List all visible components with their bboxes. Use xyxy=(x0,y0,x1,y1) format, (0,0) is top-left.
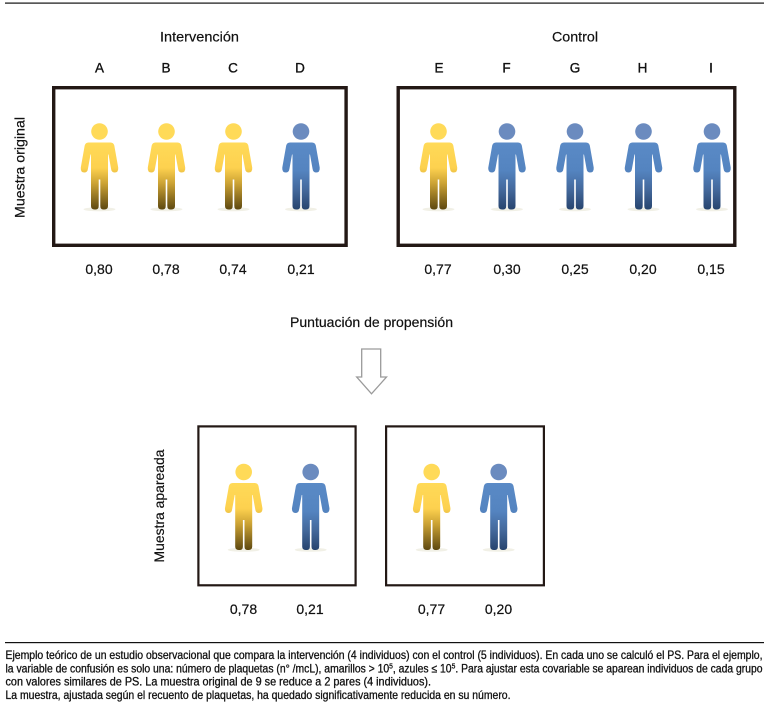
axis label: Muestra original: Muestra original xyxy=(12,117,28,218)
panel: intervención original xyxy=(54,88,346,245)
column letters: H xyxy=(638,60,647,76)
icon: person D xyxy=(282,123,320,211)
propensity scores: original sample: 0,77 xyxy=(424,261,452,277)
footnote xyxy=(6,649,762,702)
column letters: G xyxy=(570,60,580,76)
axis label: Muestra apareada: Muestra apareada xyxy=(151,449,167,562)
top rule xyxy=(5,2,764,4)
propensity scores: matched sample: 0,20 xyxy=(485,601,512,617)
panel: pair 2 xyxy=(386,426,544,585)
propensity scores: original sample xyxy=(85,261,725,277)
column letters: F xyxy=(502,60,511,76)
icon: person blue xyxy=(480,464,517,552)
footnote: la variable de confusión es solo una: número de plaquetas (n° /mcL), amarillos > 10 xyxy=(6,662,435,675)
propensity scores: original sample: 0,80 xyxy=(85,261,113,277)
column letters: C xyxy=(228,60,238,76)
arrow: down xyxy=(357,349,386,394)
column letters: D xyxy=(295,60,305,76)
heading: Puntuación de propensión: Puntuación de propensión xyxy=(290,314,453,330)
footnote: La muestra, ajustada según el recuento de plaquetas, ha quedado significativamente reducida en su número. xyxy=(6,689,510,702)
footnote: 5 xyxy=(389,661,393,670)
propensity scores: original sample: 0,21 xyxy=(287,261,315,277)
footnote: , azules ≤ 10 xyxy=(393,662,452,675)
icon: person yellow xyxy=(413,464,450,552)
propensity scores: original sample: 0,15 xyxy=(697,261,725,277)
propensity scores: original sample: 0,74 xyxy=(219,261,247,277)
heading: Intervención: Intervención xyxy=(160,28,239,44)
icon: person A xyxy=(81,123,118,211)
propensity scores: original sample: 0,25 xyxy=(561,261,589,277)
footnote: 5 xyxy=(452,661,455,670)
heading: Control: Control xyxy=(552,28,598,44)
propensity scores: matched sample xyxy=(230,601,512,617)
column letters xyxy=(95,60,713,76)
icon: person C xyxy=(215,123,252,211)
footnote: con valores similares de PS. La muestra original de 9 se reduce a 2 pares (4 individuos). xyxy=(6,676,431,688)
icon: person blue xyxy=(292,464,329,552)
column letters: B xyxy=(161,60,171,76)
propensity scores: matched sample: 0,21 xyxy=(296,601,324,617)
icon: person E xyxy=(420,123,457,211)
column letters: E xyxy=(434,60,444,76)
column letters: I xyxy=(709,60,713,76)
footer rule xyxy=(5,642,764,643)
column letters: A xyxy=(95,60,104,76)
icon: person yellow xyxy=(225,464,262,552)
icon: person I xyxy=(693,123,731,211)
icon: person G xyxy=(556,123,594,211)
propensity scores: matched sample: 0,78 xyxy=(230,601,257,617)
icon: person B xyxy=(148,123,185,211)
propensity scores: original sample: 0,20 xyxy=(629,261,657,277)
panel: control original xyxy=(398,88,735,245)
propensity scores: original sample: 0,78 xyxy=(152,261,180,277)
propensity scores: original sample: 0,30 xyxy=(493,261,521,277)
panel: pair 1 xyxy=(198,426,356,585)
icon: person H xyxy=(625,123,662,211)
propensity scores: matched sample: 0,77 xyxy=(418,601,445,617)
icon: person F xyxy=(488,123,526,211)
